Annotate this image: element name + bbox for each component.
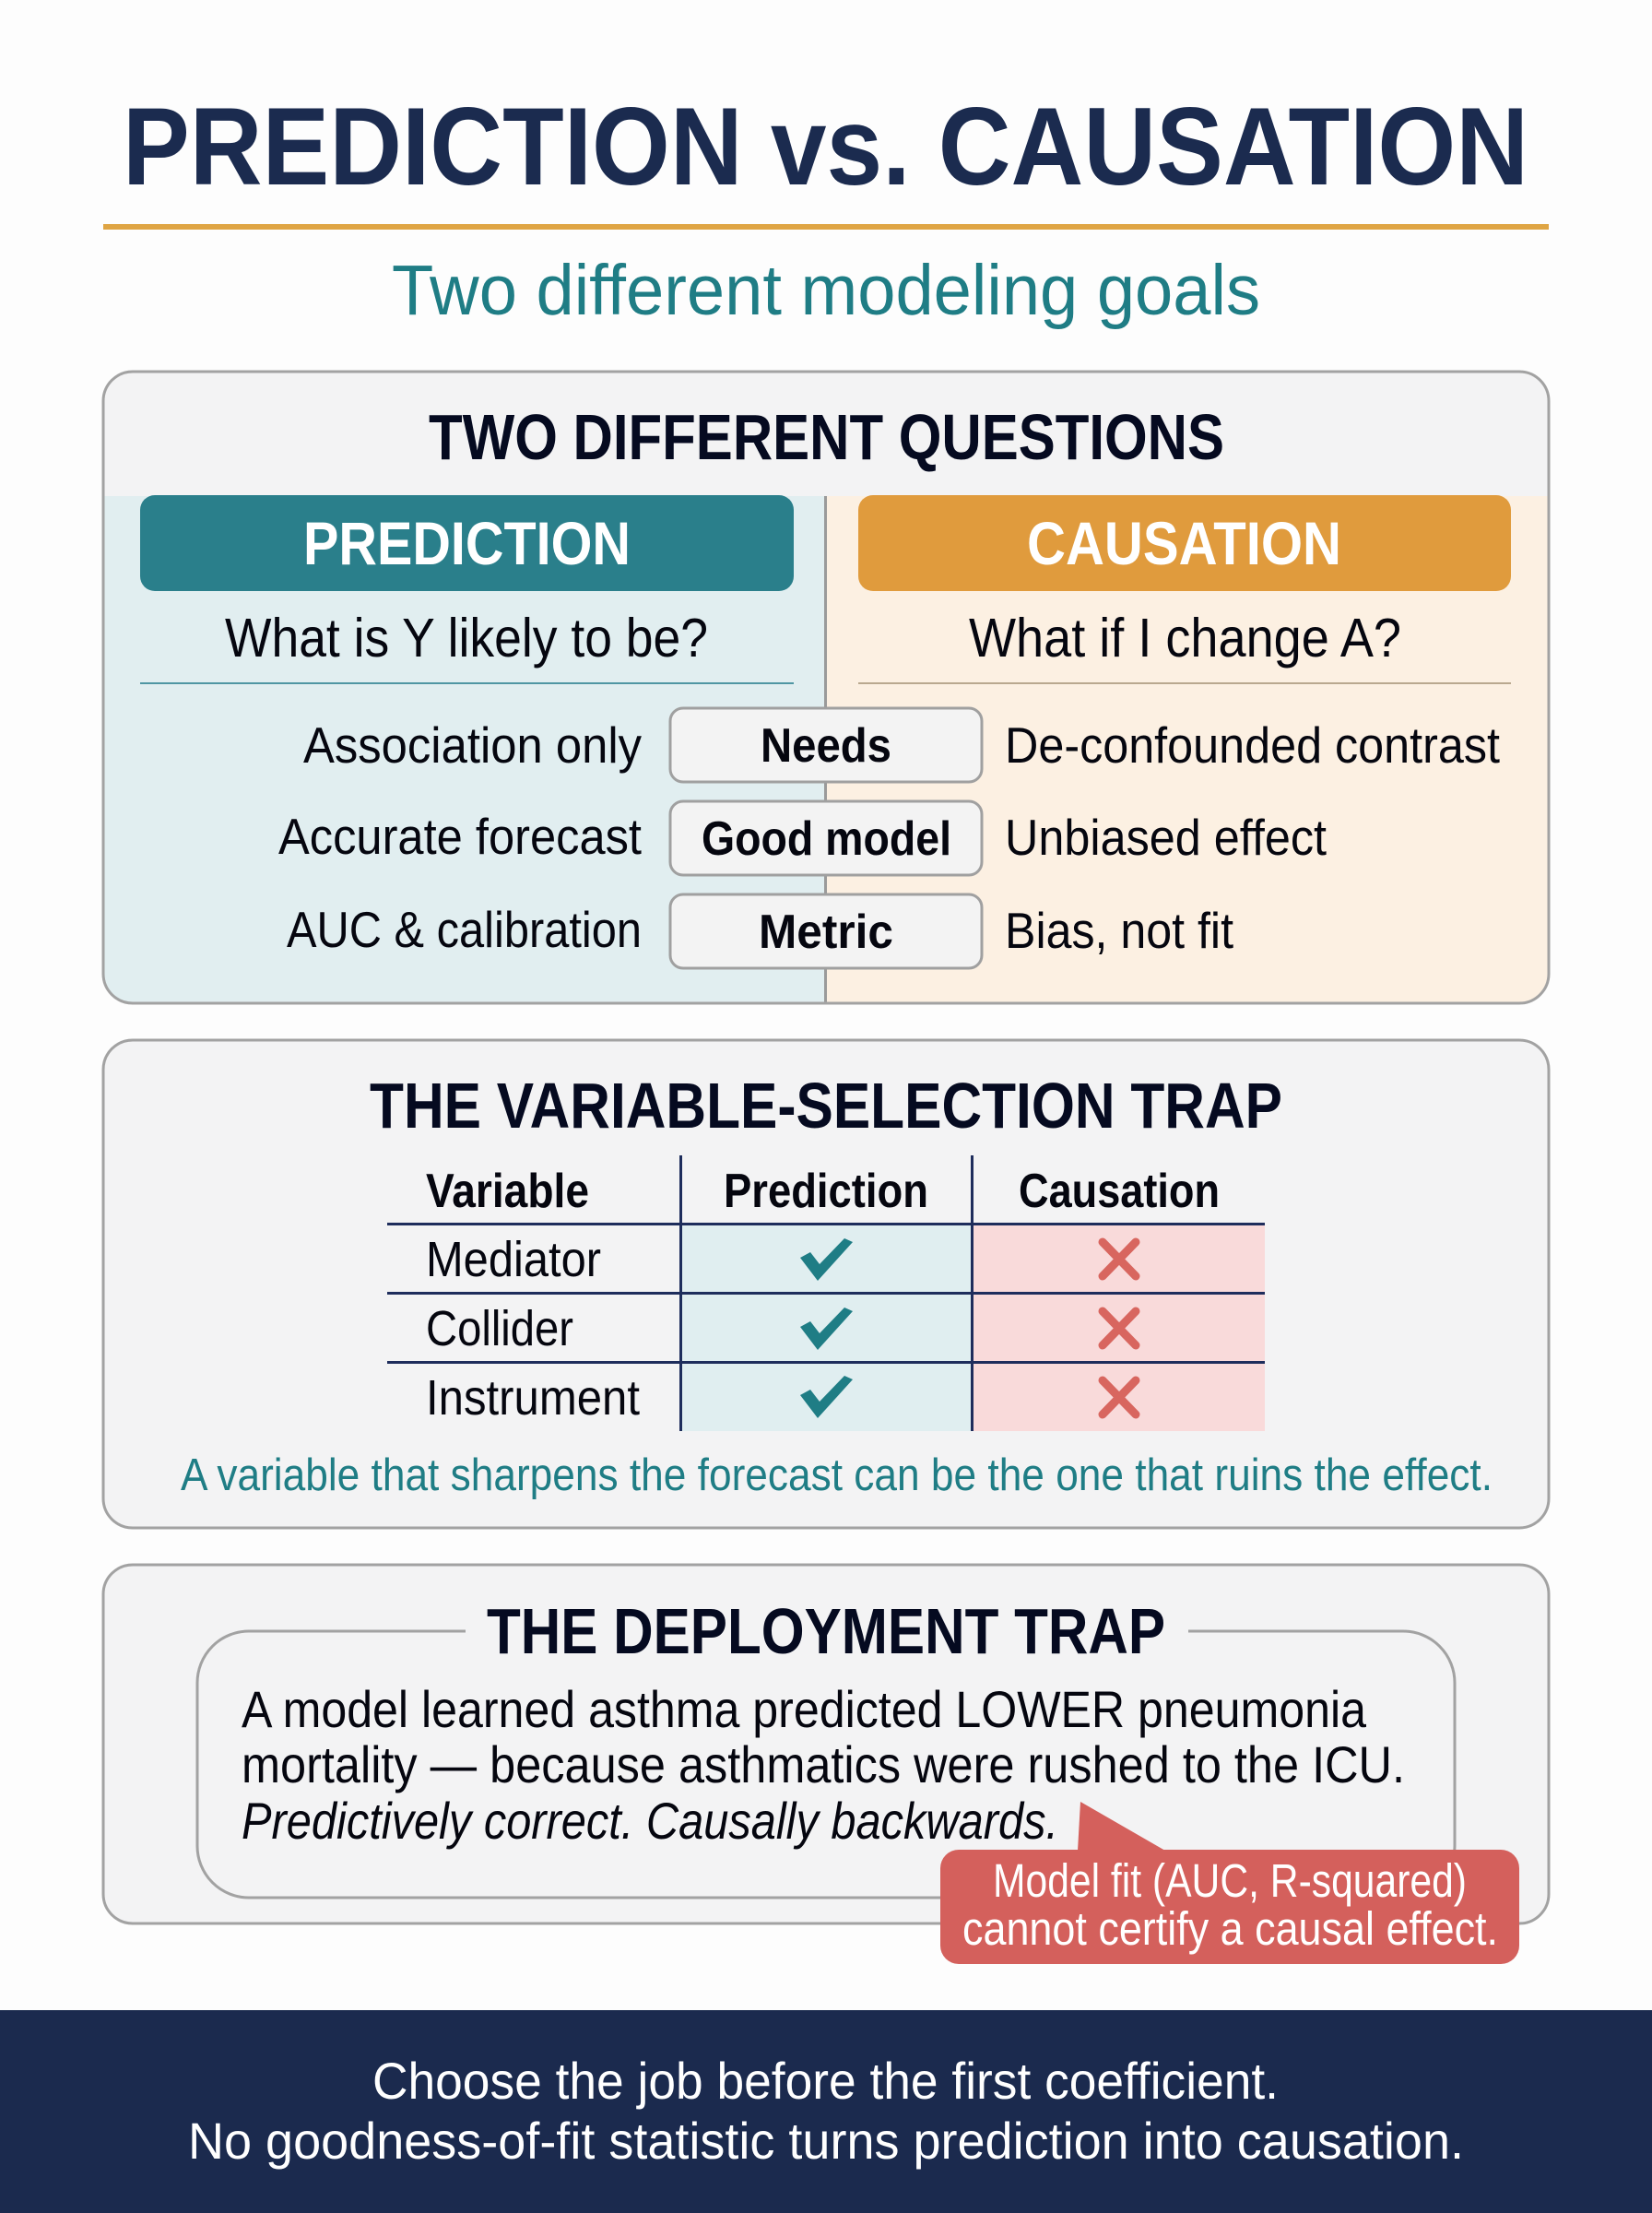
causation question: What if I change A? xyxy=(969,608,1401,669)
causation header: CAUSATION xyxy=(1027,509,1341,577)
row: metric: Bias, not fit xyxy=(1005,902,1233,959)
callout: cannot certify a causal effect. xyxy=(962,1902,1498,1955)
prediction header: PREDICTION xyxy=(303,509,631,577)
panel: variable-selection trap xyxy=(103,1040,1549,1528)
panel heading: THE VARIABLE-SELECTION TRAP xyxy=(370,1070,1282,1142)
panel background xyxy=(103,372,1549,1003)
row: metric: AUC & calibration xyxy=(287,901,642,958)
row: mediator: Mediator xyxy=(426,1232,601,1287)
row: good model xyxy=(278,801,1327,875)
row: instrument xyxy=(426,1370,1136,1426)
story text xyxy=(242,1680,1405,1850)
row: metric xyxy=(287,894,1233,968)
callout xyxy=(940,1802,1519,1964)
panel: deployment trap xyxy=(103,1565,1549,1964)
row: collider xyxy=(426,1301,1136,1356)
row: instrument: Instrument xyxy=(426,1370,640,1426)
inner frame xyxy=(197,1631,1455,1898)
row: needs: Needs xyxy=(761,719,891,773)
causation side tint xyxy=(826,496,1549,1003)
table headers: Variable xyxy=(426,1165,589,1218)
row: mediator xyxy=(426,1232,1136,1287)
table headers xyxy=(426,1165,1220,1218)
table headers: Prediction xyxy=(724,1165,928,1218)
panel: two different questions xyxy=(103,372,1549,1003)
row: needs: Association only xyxy=(303,716,642,774)
footer banner xyxy=(0,2010,1652,2213)
row: good model: Unbiased effect xyxy=(1005,809,1327,866)
row: metric: Metric xyxy=(759,905,893,959)
panel background xyxy=(103,1565,1549,1923)
title rule xyxy=(103,224,1549,230)
row: collider: Collider xyxy=(426,1301,573,1356)
footer banner: Choose the job before the first coefficient. xyxy=(372,2052,1279,2110)
centre divider xyxy=(824,496,827,1003)
story text: mortality — because asthmatics were rushed to the ICU. xyxy=(242,1735,1405,1793)
prediction side tint xyxy=(103,496,826,1003)
table headers: Causation xyxy=(1019,1165,1220,1218)
title: PREDICTION vs. CAUSATION xyxy=(123,85,1528,208)
table takeaway: A variable that sharpens the forecast can be the one that ruins the effect. xyxy=(181,1450,1493,1500)
story text: A model learned asthma predicted LOWER pneumonia xyxy=(242,1680,1367,1738)
row: needs: De-confounded contrast xyxy=(1005,716,1500,774)
panel background xyxy=(103,1040,1549,1528)
footer banner: No goodness-of-fit statistic turns prediction into causation. xyxy=(188,2112,1464,2170)
row: needs xyxy=(303,708,1500,782)
prediction question: What is Y likely to be? xyxy=(225,608,708,669)
causation header xyxy=(858,495,1511,591)
panel heading: THE DEPLOYMENT TRAP xyxy=(487,1595,1165,1667)
row: good model: Good model xyxy=(702,812,951,866)
variable table xyxy=(387,1155,1265,1431)
panel heading: TWO DIFFERENT QUESTIONS xyxy=(429,401,1224,473)
story text: Predictively correct. Causally backwards. xyxy=(242,1792,1058,1850)
callout: Model fit (AUC, R-squared) xyxy=(993,1854,1467,1907)
prediction header xyxy=(140,495,794,591)
row: good model: Accurate forecast xyxy=(278,808,642,865)
panel border xyxy=(103,372,1549,1003)
subtitle: Two different modeling goals xyxy=(392,251,1260,330)
